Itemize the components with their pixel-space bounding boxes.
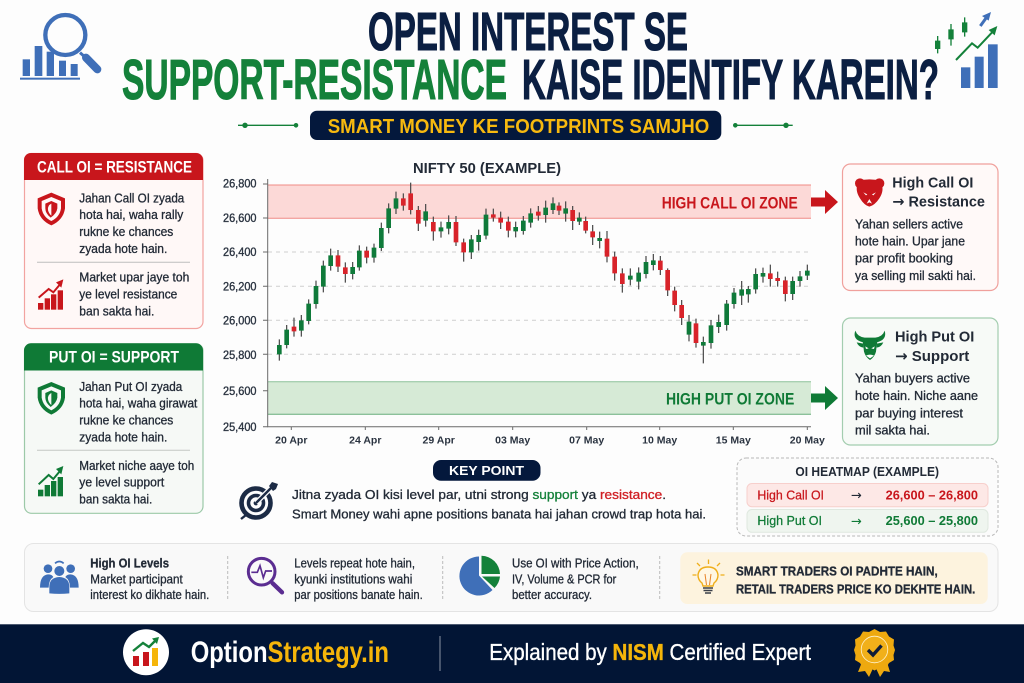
panel header: put OI: PUT OI = SUPPORT — [49, 348, 179, 366]
heatmap row: put: → — [851, 514, 862, 529]
text: put OI market note: ye level support — [79, 476, 165, 490]
text: high OI levels: interest ko dikhate hain. — [90, 588, 209, 602]
y axis labels: 25,800 — [223, 348, 257, 362]
chart heading: NIFTY 50 (EXAMPLE) — [413, 161, 561, 177]
text: call OI explanation — [79, 191, 184, 256]
text: put OI explanation: rukne ke chances — [79, 414, 173, 428]
key point pill: KEY POINT — [449, 463, 524, 478]
x axis labels: 24 Apr — [349, 434, 381, 446]
card: high put OI — [842, 318, 998, 445]
text: call OI explanation: rukne ke chances — [79, 225, 173, 239]
text: use OI with price action: Use OI with Price Action, — [512, 556, 639, 570]
subtitle pill — [310, 111, 721, 140]
text: high call OI body: hote hain. Upar jane — [855, 235, 965, 249]
title: SUPPORT-RESISTANCE — [122, 48, 507, 112]
icon: magnifier with pulse — [248, 558, 282, 592]
heading: high put OI: → Support — [895, 347, 969, 365]
heading: high call OI: High Call OI — [892, 175, 973, 192]
badge: certified — [854, 629, 895, 677]
icon: candles and growth chart — [938, 12, 998, 88]
text: high put OI body — [855, 372, 978, 437]
heatmap row: put: High Put OI — [757, 514, 822, 528]
panel header: call OI — [24, 153, 203, 180]
text: call OI explanation: hota hai, waha rally — [79, 208, 184, 222]
text: call OI market note — [79, 271, 189, 318]
text: high call OI body: par profit booking — [855, 252, 953, 266]
heading: high call OI — [892, 175, 985, 211]
axes — [263, 179, 811, 430]
text: call OI market note: ban sakta hai. — [79, 304, 154, 318]
panel: OI heatmap: OI HEATMAP (EXAMPLE) — [795, 465, 939, 479]
y axis labels: 26,000 — [223, 314, 257, 328]
footer band — [0, 624, 1024, 683]
y axis labels: 25,600 — [223, 384, 257, 398]
x axis labels: 15 May — [716, 434, 751, 446]
y axis labels — [223, 176, 257, 434]
text: call OI market note: Market upar jaye toh — [79, 271, 189, 285]
key point text: Jitna zyada OI kisi level par, utni strong support ya resistance . — [292, 488, 666, 502]
y axis labels: 26,200 — [223, 280, 257, 294]
decorative line right — [734, 123, 793, 128]
icon: target with arrow — [241, 482, 278, 519]
text: high call OI body: ya selling mil sakti hai. — [855, 269, 976, 283]
text: high put OI body: mil sakta hai. — [855, 423, 930, 437]
arrow: call zone to resistance card — [811, 190, 838, 214]
y axis labels: 26,400 — [223, 245, 257, 259]
zone: high call OI: HIGH CALL OI ZONE — [662, 193, 798, 212]
icon: people — [40, 561, 79, 594]
icon: green rising chart — [38, 466, 63, 496]
heatmap row: put — [747, 510, 988, 532]
heatmap row: call: → — [851, 489, 862, 504]
icon: bear — [855, 178, 884, 207]
icon: red shield — [38, 193, 65, 225]
text: use OI with price action — [512, 556, 639, 602]
decorative line left — [238, 123, 298, 128]
text: high call OI body — [855, 218, 976, 283]
zone: high put OI: HIGH PUT OI ZONE — [666, 389, 794, 408]
key point text — [292, 488, 706, 521]
heatmap row: call: High Call OI — [757, 488, 824, 502]
text: put OI explanation — [79, 380, 198, 445]
icon: light bulb — [692, 560, 724, 593]
heatmap row: call — [747, 484, 988, 507]
text: call OI explanation: Jahan Call OI zyada — [79, 191, 184, 205]
text: put OI explanation: zyada hote hain. — [79, 431, 167, 445]
text: high OI levels: High OI Levels — [90, 556, 169, 570]
x axis labels: 20 May — [790, 434, 825, 446]
text: high put OI body: hote hain. Niche aane — [855, 389, 978, 403]
y axis labels: 25,400 — [223, 420, 257, 434]
text: call OI explanation: zyada hote hain. — [79, 242, 167, 256]
x axis labels: 29 Apr — [423, 434, 455, 446]
heading: high call OI: → Resistance — [892, 193, 985, 211]
tagline: Explained by NISM Certified Expert — [489, 639, 812, 665]
text: put OI market note: ban sakta hai. — [79, 493, 152, 507]
y axis labels: 26,800 — [223, 176, 257, 190]
heading: high put OI — [895, 329, 974, 365]
text: use OI with price action: better accuracy. — [512, 588, 592, 602]
text: levels repeat: Levels repeat hote hain, — [294, 556, 415, 570]
text: call OI market note: ye level resistance — [79, 287, 177, 301]
icon: green shield — [38, 382, 65, 415]
heatmap row: put: 25,600 – 25,800 — [886, 513, 978, 528]
zone: high call OI — [268, 185, 811, 218]
panel: bottom insights — [24, 544, 998, 612]
x axis labels: 03 May — [495, 434, 530, 446]
icon: pie chart — [459, 556, 500, 595]
heatmap row: call: 26,600 – 26,800 — [886, 487, 978, 502]
text: levels repeat: par positions banate hain. — [294, 588, 423, 602]
key point pill — [433, 460, 540, 481]
x axis labels: 20 Apr — [275, 434, 307, 446]
panel: call OI — [24, 153, 203, 328]
x axis labels: 07 May — [569, 434, 604, 446]
key point text: Smart Money wahi apne positions banata hai jahan crowd trap hota hai. — [292, 507, 706, 521]
text: put OI market note: Market niche aaye toh — [79, 459, 194, 473]
heading: high put OI: High Put OI — [895, 329, 974, 346]
arrow: put zone to support card — [811, 386, 838, 410]
text: high put OI body: Yahan buyers active — [855, 372, 970, 386]
callout: smart traders: RETAIL TRADERS PRICE KO DEKHTE HAIN. — [736, 583, 975, 597]
callout: smart traders — [680, 552, 988, 604]
logo text: OptionStrategy.in — [191, 636, 389, 669]
text: put OI explanation: Jahan Put OI zyada — [79, 380, 182, 394]
panel header: call OI: CALL OI = RESISTANCE — [37, 158, 192, 176]
icon: bull — [855, 331, 885, 360]
callout: smart traders: SMART TRADERS OI PADHTE HAIN, — [736, 565, 938, 579]
panel: put OI — [24, 343, 203, 513]
card: high call OI — [842, 164, 998, 290]
text: use OI with price action: IV, Volume & PCR for — [512, 572, 616, 586]
candles: May — [531, 197, 807, 363]
icon: red rising chart — [38, 279, 63, 310]
text: put OI market note — [79, 459, 194, 507]
text: high put OI body: par buying interest — [855, 406, 964, 420]
icon: magnifier over bars — [20, 15, 97, 80]
x axis labels: 10 May — [642, 434, 677, 446]
text: levels repeat — [294, 556, 423, 602]
text: levels repeat: kyunki institutions wahi — [294, 572, 412, 586]
zone: high put OI — [268, 382, 811, 414]
title: OPEN INTEREST SE — [368, 2, 688, 62]
text: high OI levels: Market participant — [90, 572, 183, 586]
candles: April to early May — [279, 183, 523, 361]
y axis labels: 26,600 — [223, 211, 257, 225]
panel: OI heatmap — [737, 458, 998, 536]
title — [122, 2, 939, 112]
text: high call OI body: Yahan sellers active — [855, 218, 963, 232]
subtitle pill: SMART MONEY KE FOOTPRINTS SAMJHO — [328, 116, 709, 138]
text: put OI explanation: hota hai, waha girawat — [79, 397, 198, 411]
logo icon — [123, 629, 169, 675]
text: high OI levels — [90, 556, 209, 602]
x axis labels — [275, 434, 825, 446]
candlestick chart — [223, 176, 825, 446]
panel header: put OI — [24, 343, 203, 370]
